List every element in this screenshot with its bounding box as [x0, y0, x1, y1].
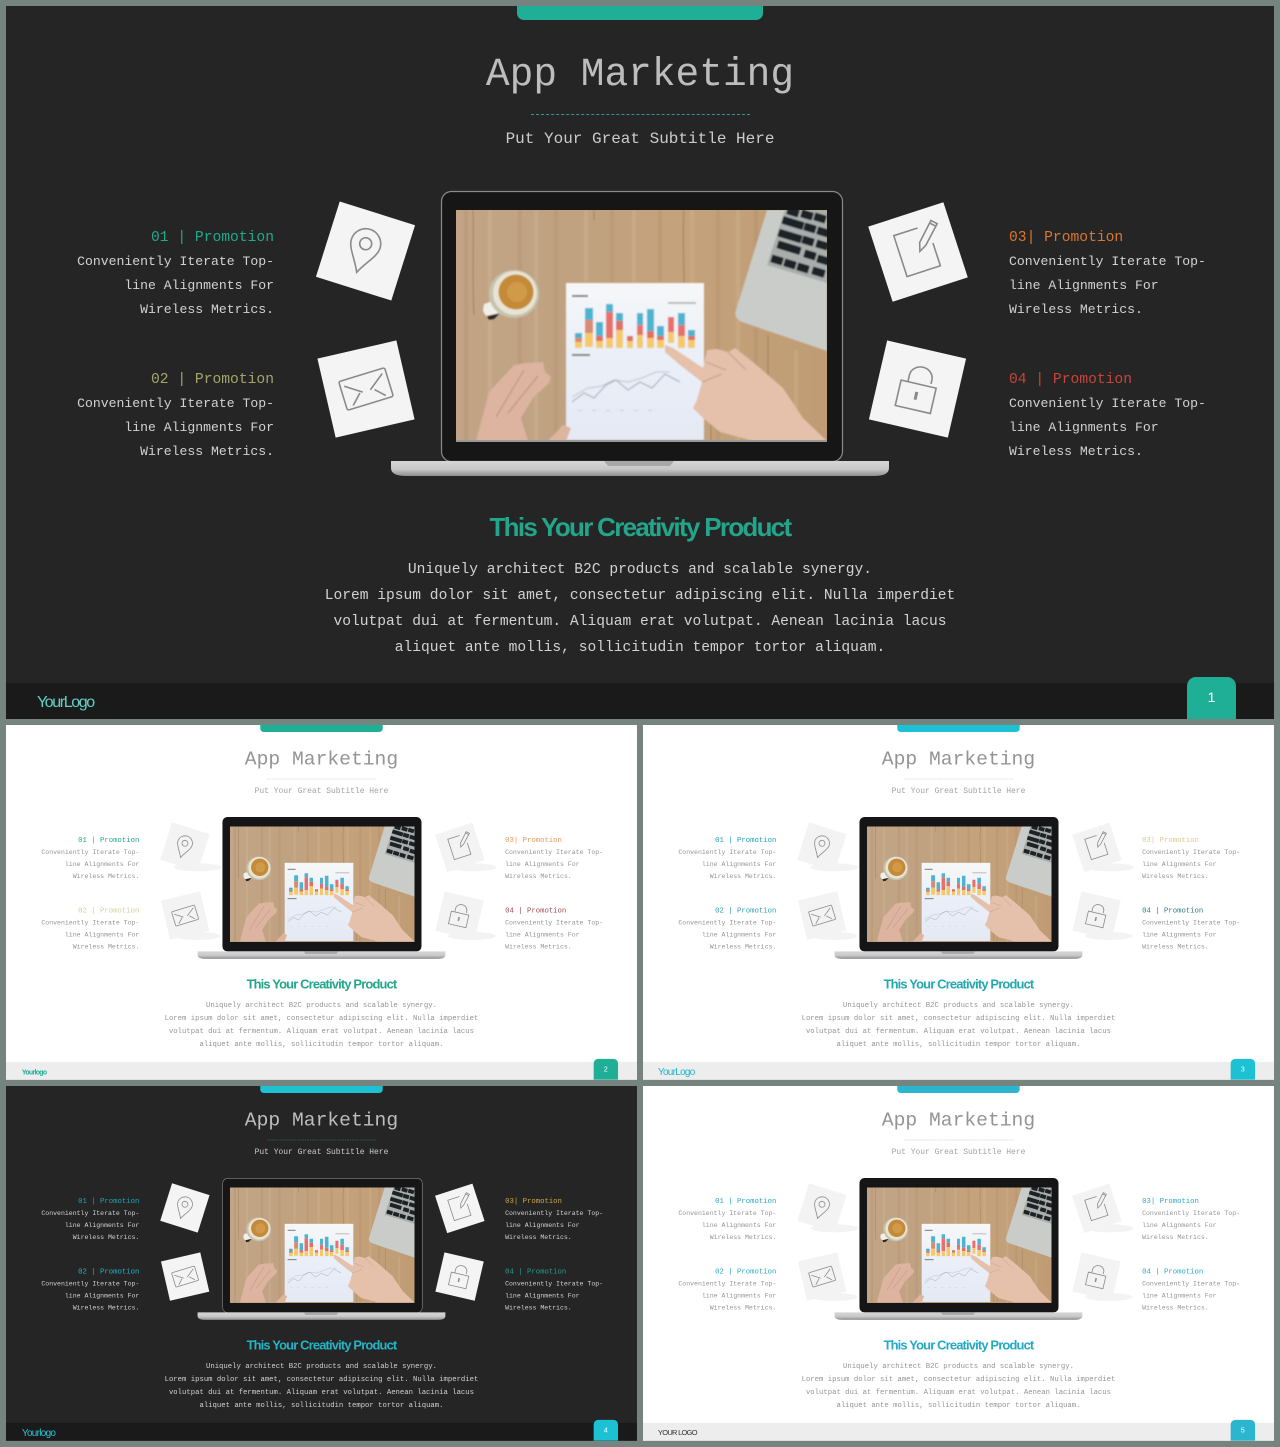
- text block 04: line Alignments For: [1142, 931, 1217, 938]
- page number: [1231, 1420, 1255, 1441]
- text block 04: 04 | Promotion: [505, 1268, 566, 1276]
- slide 5: small light blue: [643, 1086, 1274, 1441]
- page number: 2: [604, 1065, 608, 1073]
- laptop with photo: [198, 1178, 445, 1320]
- text block 03: Conveniently Iterate Top-: [1009, 254, 1206, 269]
- icon: pen and note: [1072, 823, 1134, 872]
- slide 2: small light teal: [6, 725, 637, 1080]
- page number: 3: [1241, 1065, 1245, 1073]
- body text: Uniquely architect B2C products and scalable synergy.: [206, 1363, 437, 1371]
- text block 04: 04 | Promotion: [1142, 1268, 1203, 1276]
- body text: volutpat dui at fermentum. Aliquam erat volutpat. Aenean lacinia lacus: [333, 614, 947, 630]
- text block 03: [505, 1197, 603, 1241]
- text block 03: [505, 836, 603, 880]
- text block 04: Conveniently Iterate Top-: [505, 919, 603, 927]
- text block 03: [1142, 836, 1240, 880]
- text block 03: [1009, 230, 1206, 317]
- top tab: [897, 1086, 1020, 1093]
- text block 03: 03| Promotion: [1142, 836, 1199, 844]
- logo: Yourlogo: [22, 1427, 55, 1438]
- subtitle: Put Your Great Subtitle Here: [892, 787, 1025, 796]
- text block 03: 03| Promotion: [1009, 230, 1123, 246]
- page number: [594, 1059, 618, 1080]
- slide 3: small light cyan: [643, 725, 1274, 1080]
- title: App Marketing: [882, 748, 1035, 770]
- text block 01: line Alignments For: [702, 860, 776, 868]
- text block 02: line Alignments For: [124, 420, 274, 435]
- text block 03: 03| Promotion: [1142, 1197, 1199, 1205]
- text block 01: Conveniently Iterate Top-: [77, 254, 274, 269]
- text block 01: Wireless Metrics.: [73, 872, 139, 880]
- product heading: This Your Creativity Product: [247, 1338, 396, 1353]
- text block 02: Conveniently Iterate Top-: [77, 396, 274, 411]
- logo: Yourlogo: [22, 1068, 46, 1076]
- text block 01: Wireless Metrics.: [73, 1233, 139, 1241]
- text block 01: 01 | Promotion: [78, 1197, 139, 1205]
- logo: YOUR LOGO: [658, 1428, 697, 1437]
- icon: padlock: [1072, 891, 1133, 940]
- text block 01: 01 | Promotion: [151, 230, 274, 246]
- text block 02: Wireless Metrics.: [710, 1304, 776, 1311]
- product heading: This Your Creativity Product: [247, 977, 396, 992]
- page number: [594, 1420, 618, 1441]
- icon: location pin: [316, 201, 415, 301]
- page number: [1231, 1059, 1255, 1080]
- body text: [165, 1002, 478, 1048]
- body text: aliquet ante mollis, sollicitudin tempor tortor aliquam.: [395, 640, 885, 656]
- text block 04: Conveniently Iterate Top-: [1009, 396, 1206, 411]
- text block 03: [1142, 1197, 1240, 1241]
- text block 01: line Alignments For: [124, 278, 274, 293]
- text block 01: 01 | Promotion: [78, 836, 139, 844]
- top tab: [260, 1086, 383, 1093]
- body text: Uniquely architect B2C products and scalable synergy.: [843, 1363, 1074, 1371]
- text block 02: Conveniently Iterate Top-: [678, 919, 776, 927]
- text block 04: 04 | Promotion: [1009, 372, 1132, 388]
- top tab: [517, 6, 763, 20]
- body text: Uniquely architect B2C products and scalable synergy.: [408, 562, 872, 578]
- top tab: [260, 725, 383, 732]
- subtitle: Put Your Great Subtitle Here: [255, 1148, 388, 1157]
- body text: [802, 1362, 1115, 1409]
- text block 01: Conveniently Iterate Top-: [41, 848, 139, 856]
- text block 04: Conveniently Iterate Top-: [1142, 919, 1240, 927]
- text block 03: Wireless Metrics.: [1009, 302, 1143, 317]
- text block 01: [41, 1197, 139, 1241]
- text block 01: [678, 1197, 776, 1241]
- text block 02: line Alignments For: [702, 1292, 776, 1299]
- text block 04: 04 | Promotion: [1142, 907, 1203, 915]
- subtitle: Put Your Great Subtitle Here: [255, 787, 388, 796]
- text block 03: line Alignments For: [505, 860, 580, 868]
- icon: location pin: [160, 1183, 210, 1233]
- page number: 5: [1241, 1426, 1245, 1434]
- text block 02: Conveniently Iterate Top-: [678, 1280, 776, 1288]
- body text: Lorem ipsum dolor sit amet, consectetur adipiscing elit. Nulla imperdiet: [165, 1015, 478, 1023]
- title: App Marketing: [486, 52, 794, 97]
- body text: aliquet ante mollis, sollicitudin tempor tortor aliquam.: [199, 1401, 443, 1409]
- text block 03: Wireless Metrics.: [505, 872, 572, 880]
- text block 04: Wireless Metrics.: [1142, 943, 1209, 950]
- page number: 1: [1208, 689, 1215, 705]
- icon: location pin: [797, 822, 858, 872]
- text block 02: [41, 907, 139, 950]
- text block 03: line Alignments For: [1142, 860, 1217, 868]
- title: App Marketing: [245, 1109, 398, 1131]
- text block 04: [1009, 372, 1206, 459]
- icon: pen and note: [1072, 1184, 1134, 1233]
- text block 01: Wireless Metrics.: [140, 302, 274, 317]
- text block 01: 01 | Promotion: [715, 836, 776, 844]
- text block 04: line Alignments For: [1142, 1292, 1217, 1299]
- body text: Uniquely architect B2C products and scalable synergy.: [843, 1002, 1074, 1010]
- text block 04: Wireless Metrics.: [505, 1304, 572, 1311]
- text block 04: Conveniently Iterate Top-: [505, 1280, 603, 1288]
- text block 01: 01 | Promotion: [715, 1197, 776, 1205]
- logo: YourLogo: [658, 1066, 695, 1077]
- text block 02: Wireless Metrics.: [140, 444, 274, 459]
- text block 02: [678, 907, 776, 950]
- text block 03: 03| Promotion: [505, 1197, 562, 1205]
- body text: volutpat dui at fermentum. Aliquam erat volutpat. Aenean lacinia lacus: [169, 1028, 474, 1036]
- icon: envelope: [161, 891, 220, 940]
- page number: [1187, 677, 1236, 719]
- top tab: [897, 725, 1020, 732]
- text block 01: [678, 836, 776, 880]
- body text: Lorem ipsum dolor sit amet, consectetur adipiscing elit. Nulla imperdiet: [325, 588, 955, 604]
- text block 04: [505, 1268, 603, 1311]
- slide 4: small dark: [6, 1086, 637, 1441]
- text block 04: [505, 907, 603, 950]
- icon: padlock: [1072, 1252, 1133, 1301]
- product heading: This Your Creativity Product: [884, 1338, 1033, 1353]
- product heading: This Your Creativity Product: [884, 977, 1033, 992]
- body text: Lorem ipsum dolor sit amet, consectetur adipiscing elit. Nulla imperdiet: [802, 1376, 1115, 1384]
- title: App Marketing: [882, 1109, 1035, 1131]
- text block 02: Wireless Metrics.: [710, 943, 776, 950]
- text block 04: Conveniently Iterate Top-: [1142, 1280, 1240, 1288]
- body text: Lorem ipsum dolor sit amet, consectetur adipiscing elit. Nulla imperdiet: [802, 1015, 1115, 1023]
- text block 01: [77, 230, 274, 317]
- subtitle: Put Your Great Subtitle Here: [506, 130, 774, 148]
- text block 02: 02 | Promotion: [151, 372, 274, 388]
- icon: pen and note: [868, 202, 968, 302]
- text block 03: Wireless Metrics.: [1142, 1233, 1209, 1241]
- text block 04: line Alignments For: [505, 931, 580, 938]
- product heading: This Your Creativity Product: [489, 512, 791, 542]
- body text: volutpat dui at fermentum. Aliquam erat volutpat. Aenean lacinia lacus: [169, 1389, 474, 1397]
- page number: 4: [604, 1426, 608, 1434]
- text block 02: 02 | Promotion: [715, 1268, 776, 1276]
- body text: Lorem ipsum dolor sit amet, consectetur adipiscing elit. Nulla imperdiet: [165, 1376, 478, 1384]
- body text: [802, 1002, 1115, 1048]
- title: App Marketing: [245, 748, 398, 770]
- body text: aliquet ante mollis, sollicitudin tempor tortor aliquam.: [836, 1040, 1080, 1048]
- text block 02: line Alignments For: [65, 1292, 139, 1299]
- text block 01: Conveniently Iterate Top-: [678, 848, 776, 856]
- logo: YourLogo: [37, 694, 94, 711]
- body text: [325, 562, 955, 656]
- laptop with photo: [391, 192, 889, 476]
- body text: aliquet ante mollis, sollicitudin tempor tortor aliquam.: [836, 1401, 1080, 1409]
- icon: envelope: [798, 891, 857, 940]
- text block 02: line Alignments For: [702, 931, 776, 938]
- text block 02: [41, 1268, 139, 1311]
- laptop with photo: [835, 817, 1082, 959]
- text block 03: Wireless Metrics.: [1142, 872, 1209, 880]
- text block 03: line Alignments For: [1009, 278, 1159, 293]
- text block 02: [77, 372, 274, 459]
- text block 02: 02 | Promotion: [715, 907, 776, 915]
- laptop with photo: [198, 817, 445, 959]
- text block 02: Conveniently Iterate Top-: [41, 1280, 139, 1288]
- text block 04: line Alignments For: [505, 1292, 580, 1299]
- text block 01: line Alignments For: [65, 860, 139, 868]
- text block 02: [678, 1268, 776, 1311]
- text block 03: Wireless Metrics.: [505, 1233, 572, 1241]
- laptop with photo: [835, 1178, 1082, 1320]
- icon: envelope: [317, 340, 415, 438]
- text block 04: [1142, 907, 1240, 950]
- icon: location pin: [797, 1183, 858, 1233]
- icon: location pin: [160, 822, 221, 872]
- subtitle: Put Your Great Subtitle Here: [892, 1148, 1025, 1157]
- text block 01: [41, 836, 139, 880]
- text block 03: line Alignments For: [505, 1221, 580, 1229]
- body text: volutpat dui at fermentum. Aliquam erat volutpat. Aenean lacinia lacus: [806, 1389, 1111, 1397]
- icon: envelope: [161, 1252, 209, 1301]
- text block 04: line Alignments For: [1009, 420, 1159, 435]
- text block 01: Conveniently Iterate Top-: [678, 1209, 776, 1217]
- icon: envelope: [798, 1252, 857, 1301]
- text block 04: [1142, 1268, 1240, 1311]
- text block 03: Conveniently Iterate Top-: [505, 848, 603, 856]
- text block 04: Wireless Metrics.: [505, 943, 572, 950]
- icon: pen and note: [435, 1184, 485, 1233]
- text block 02: Conveniently Iterate Top-: [41, 919, 139, 927]
- text block 01: Wireless Metrics.: [710, 1233, 776, 1241]
- icon: pen and note: [435, 823, 497, 872]
- text block 03: Conveniently Iterate Top-: [1142, 1209, 1240, 1217]
- text block 01: line Alignments For: [65, 1221, 139, 1229]
- text block 02: Wireless Metrics.: [73, 943, 139, 950]
- text block 04: Wireless Metrics.: [1142, 1304, 1209, 1311]
- slide 1: large dark: [6, 6, 1274, 719]
- text block 02: Wireless Metrics.: [73, 1304, 139, 1311]
- text block 03: Conveniently Iterate Top-: [505, 1209, 603, 1217]
- text block 03: 03| Promotion: [505, 836, 562, 844]
- text block 01: Conveniently Iterate Top-: [41, 1209, 139, 1217]
- body text: Uniquely architect B2C products and scalable synergy.: [206, 1002, 437, 1010]
- body text: aliquet ante mollis, sollicitudin tempor tortor aliquam.: [199, 1040, 443, 1048]
- body text: [165, 1362, 478, 1409]
- icon: padlock: [435, 891, 496, 940]
- text block 03: line Alignments For: [1142, 1221, 1217, 1229]
- text block 01: line Alignments For: [702, 1221, 776, 1229]
- icon: padlock: [869, 340, 966, 438]
- text block 04: Wireless Metrics.: [1009, 444, 1143, 459]
- body text: volutpat dui at fermentum. Aliquam erat volutpat. Aenean lacinia lacus: [806, 1028, 1111, 1036]
- text block 04: 04 | Promotion: [505, 907, 566, 915]
- icon: padlock: [435, 1252, 484, 1301]
- text block 03: Conveniently Iterate Top-: [1142, 848, 1240, 856]
- text block 02: line Alignments For: [65, 931, 139, 938]
- text block 02: 02 | Promotion: [78, 1268, 139, 1276]
- text block 02: 02 | Promotion: [78, 907, 139, 915]
- text block 01: Wireless Metrics.: [710, 872, 776, 880]
